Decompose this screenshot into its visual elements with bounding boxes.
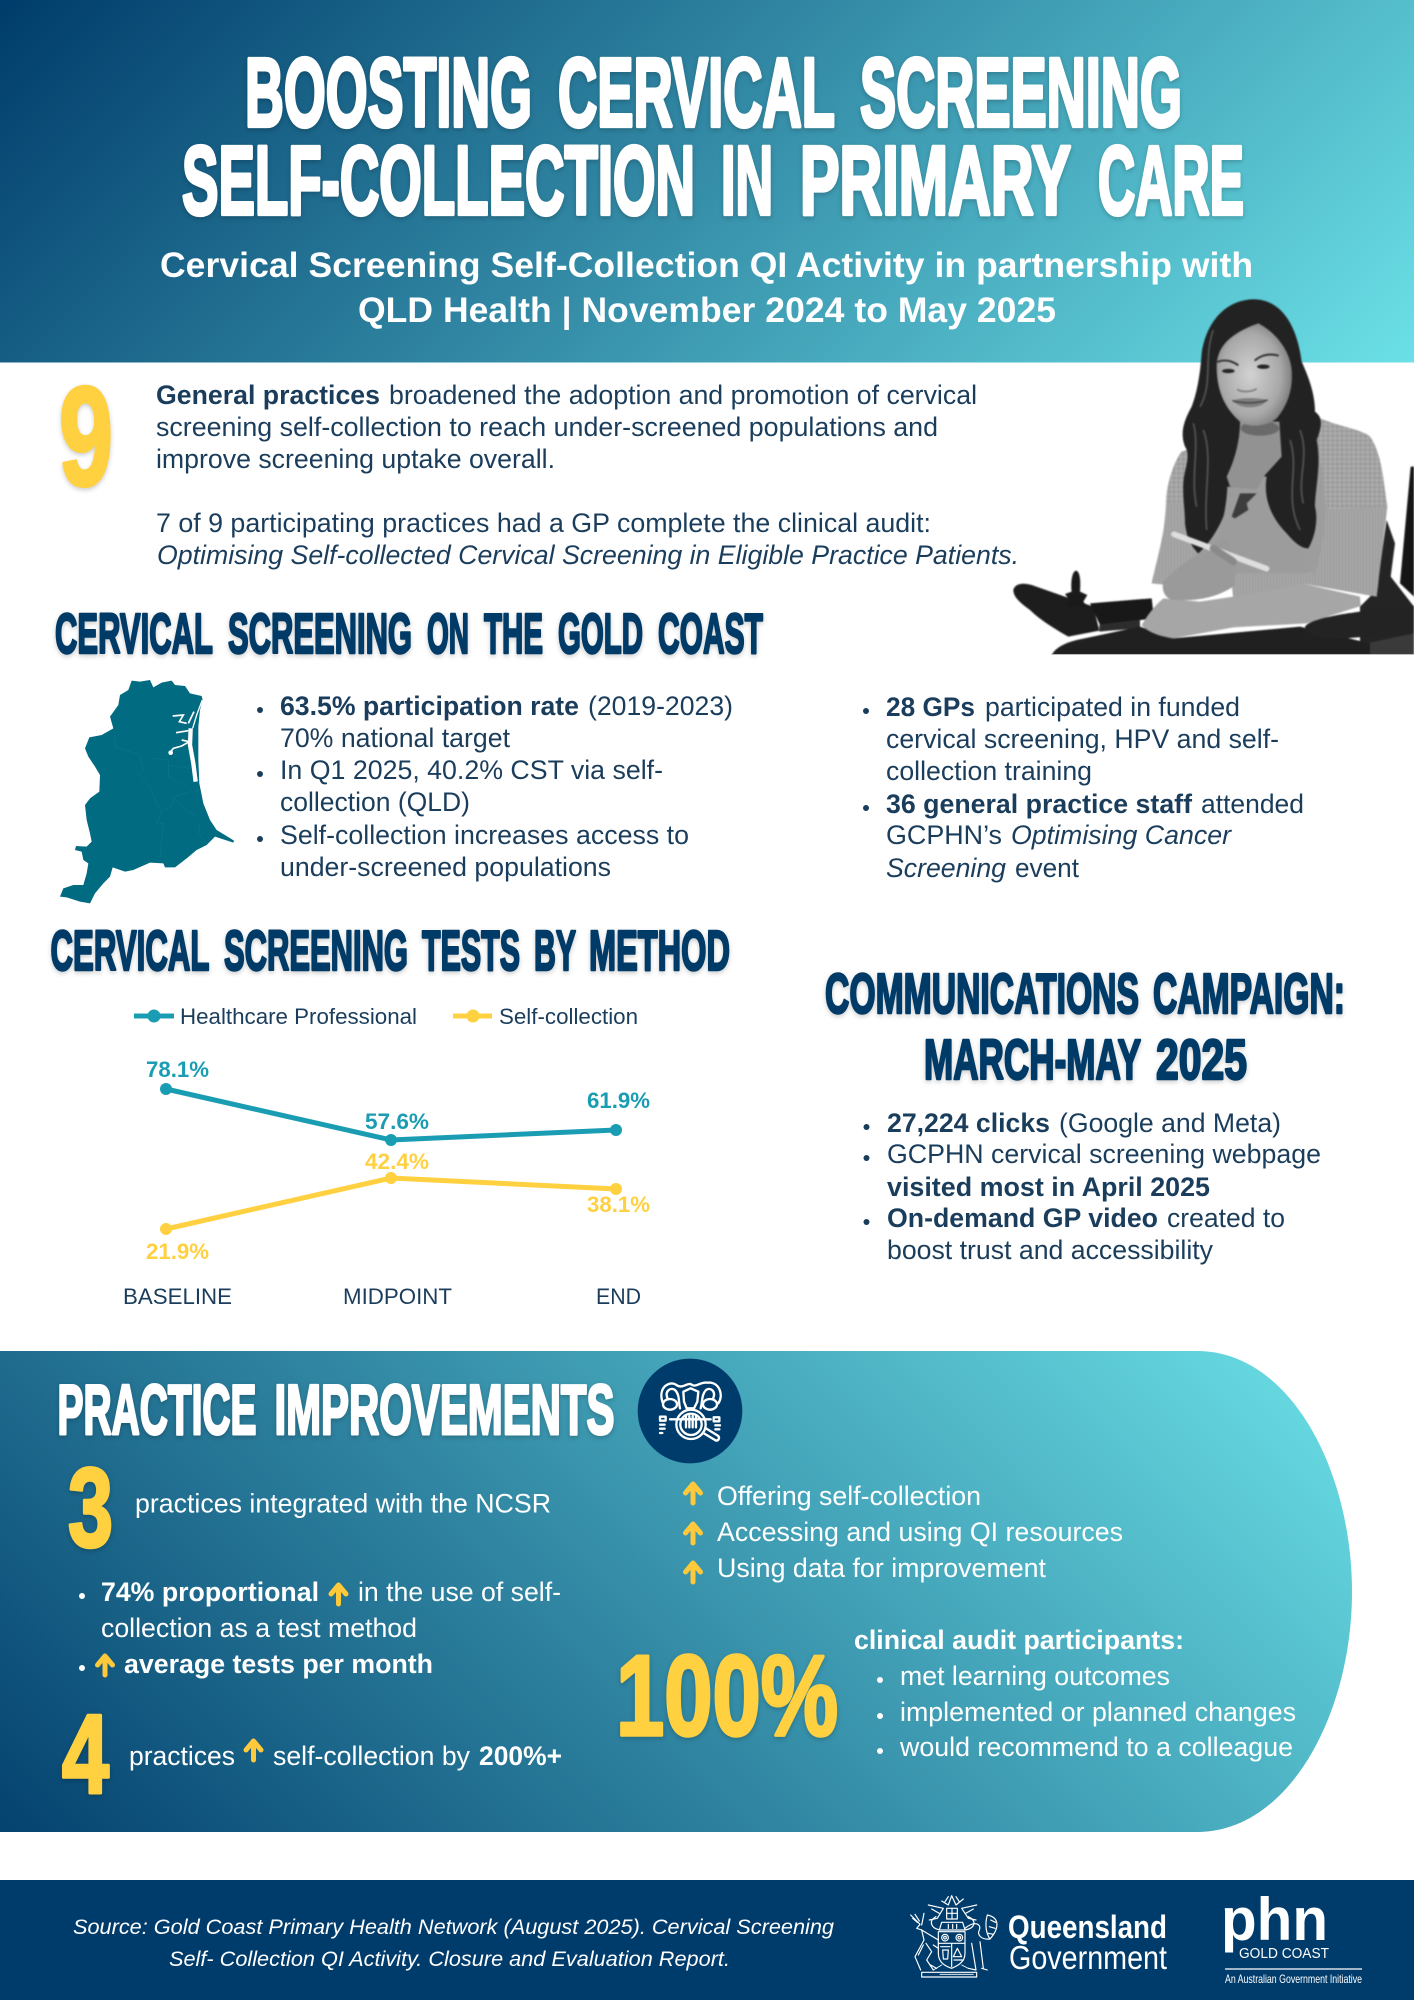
source citation [73, 1914, 834, 1971]
heading: tests by method: CERVICAL [50, 919, 210, 982]
bullets: proportional increase: average tests per month [124, 1649, 433, 1679]
intro paragraph: General practices [156, 380, 380, 410]
chart legend: Healthcare Professional [180, 1004, 417, 1029]
text: practices increased self-collection: practices [129, 1741, 235, 1771]
heading: tests by method: TESTS [422, 919, 520, 982]
self-collection series: 42.4% [365, 1149, 429, 1174]
bullets: GP training: attended [1201, 789, 1304, 819]
photo: GP in wheelchair holding a pen [1013, 299, 1414, 655]
header banner [0, 0, 1414, 362]
logo: Queensland Government [911, 1896, 1167, 1977]
heading: practice improvements: PRACTICE [58, 1370, 256, 1449]
panel: practice improvements [0, 1351, 1352, 1832]
bullets: proportional increase [79, 1577, 561, 1679]
chart x axis labels: END [596, 1284, 641, 1309]
bullets: participation: collection (QLD) [280, 787, 470, 817]
chart x axis labels [123, 1284, 641, 1309]
intro paragraph: improve screening uptake overall. [156, 444, 555, 474]
subtitle: QLD Health | November 2024 to May 2025 [358, 290, 1056, 330]
intro paragraph: Optimising Self-collected Cervical Screening in Eligible Practice Patients. [157, 540, 1019, 570]
bullets: proportional increase: collection as a test method [101, 1613, 417, 1643]
bullets: GP training: participated in funded [985, 692, 1240, 722]
source citation: Source: Gold Coast Primary Health Network (August 2025). Cervical Screening [73, 1914, 834, 1939]
chart legend: Self-collection [499, 1004, 638, 1029]
list: clinical audit participants: clinical audit participants: [854, 1625, 1184, 1655]
list: clinical audit participants: met learning outcomes [900, 1661, 1170, 1691]
bullets: GP training: collection training [886, 756, 1092, 786]
title: SELF-COLLECTION [182, 126, 695, 235]
heading: tests by method: METHOD [589, 919, 730, 982]
heading: tests by method: SCREENING [224, 919, 408, 982]
icon: up arrow [686, 1563, 700, 1582]
intro paragraph: 7 of 9 participating practices had a GP complete the clinical audit: [156, 508, 931, 538]
bullets: campaign [864, 1108, 1321, 1265]
crest [911, 1896, 997, 1977]
bullets: GP training: 28 GPs [886, 692, 975, 722]
logo: Queensland Government: Government [1009, 1939, 1167, 1976]
heading: tests by method [50, 919, 730, 982]
chart legend [134, 1004, 638, 1029]
title: IN [721, 126, 773, 235]
healthcare professional series [146, 1057, 650, 1146]
list: clinical audit participants: implemented or planned changes [900, 1697, 1296, 1727]
chart x axis labels: BASELINE [123, 1284, 232, 1309]
text: practices increased self-collection [129, 1741, 562, 1771]
footer band [0, 1880, 1414, 2000]
list: increases in practice activity: Offering self-collection [717, 1481, 981, 1511]
intro paragraph [156, 380, 1019, 570]
bullets: participation: Self-collection increases access to [280, 820, 689, 850]
chart x axis labels: MIDPOINT [343, 1284, 452, 1309]
big number 9: 9 [59, 357, 113, 515]
list: clinical audit participants [854, 1625, 1296, 1762]
bullets: participation: under-screened populations [280, 852, 611, 882]
bullets: GP training: 36 general practice staff [886, 789, 1192, 819]
heading: cervical screening on the gold coast: THE [484, 602, 543, 665]
heading: tests by method: BY [534, 919, 576, 982]
bullets: GP training: GCPHN’s [886, 820, 1002, 850]
title: PRIMARY [800, 126, 1071, 235]
bullets: GP training: Screening [886, 853, 1006, 883]
bullets: GP training: cervical screening, HPV and self- [886, 724, 1279, 754]
list: increases in practice activity: Using data for improvement [717, 1553, 1047, 1583]
big number 100%: 100% [616, 1633, 838, 1760]
icon: up arrow [98, 1656, 112, 1675]
title [182, 38, 1244, 235]
healthcare professional series: 57.6% [365, 1109, 429, 1134]
text: practices integrated: practices integrated with the NCSR [135, 1488, 551, 1518]
self-collection series: 21.9% [146, 1239, 209, 1264]
text: practices increased self-collection: self-collection by [273, 1741, 471, 1771]
logo: PHN Gold Coast [1221, 1886, 1362, 1986]
title: CERVICAL [558, 38, 835, 147]
heading: communications campaign: MARCH-MAY [924, 1028, 1141, 1091]
bullets: campaign: GCPHN cervical screening webpage [887, 1139, 1321, 1169]
icon: up arrow [331, 1585, 346, 1604]
heading: cervical screening on the gold coast: ON [427, 602, 469, 665]
heading: cervical screening on the gold coast [55, 602, 763, 665]
bullets: campaign: On-demand GP video [887, 1203, 1158, 1233]
heading: cervical screening on the gold coast: GOLD [558, 602, 643, 665]
heading: practice improvements: IMPROVEMENTS [274, 1370, 614, 1449]
bullets: participation: 70% national target [280, 723, 511, 753]
bullets: participation [257, 691, 733, 882]
heading: communications campaign [825, 962, 1345, 1091]
list: clinical audit participants: would recommend to a colleague [899, 1732, 1293, 1762]
bullets: GP training [863, 692, 1304, 883]
healthcare professional series: 78.1% [146, 1057, 209, 1082]
heading: communications campaign: COMMUNICATIONS [825, 962, 1139, 1025]
heading: practice improvements [58, 1370, 614, 1449]
bullets: participation: In Q1 2025, 40.2% CST via self- [280, 755, 663, 785]
logo: PHN Gold Coast: An Australian Government Initiative [1225, 1972, 1362, 1986]
subtitle [160, 245, 1253, 330]
bullets: campaign: 27,224 clicks [887, 1108, 1050, 1138]
text: practices increased self-collection: 200%+ [479, 1741, 562, 1771]
subtitle: Cervical Screening Self-Collection QI Activity in partnership with [160, 245, 1253, 285]
icon: up arrow [246, 1741, 261, 1760]
map: Gold Coast region [60, 680, 234, 903]
self-collection series: 38.1% [587, 1192, 650, 1217]
intro paragraph: screening self-collection to reach under-screened populations and [156, 412, 938, 442]
intro paragraph: broadened the adoption and promotion of cervical [389, 380, 977, 410]
title: CARE [1098, 126, 1244, 235]
bullets: campaign: visited most in April 2025 [887, 1172, 1210, 1202]
heading: communications campaign: 2025 [1156, 1028, 1247, 1091]
bullets: GP training: Optimising Cancer [1011, 820, 1232, 850]
bullets: proportional increase: 74% proportional [101, 1577, 319, 1607]
bullets: campaign: (Google and Meta) [1059, 1108, 1281, 1138]
bullets: campaign: boost trust and accessibility [887, 1235, 1214, 1265]
self-collection series [146, 1149, 650, 1264]
icon: uterus under magnifying glass [638, 1359, 742, 1463]
logo: PHN Gold Coast: GOLD COAST [1239, 1945, 1329, 1962]
bullets: participation: 63.5% participation rate [280, 691, 579, 721]
line chart: tests by method [123, 1004, 650, 1309]
bullets: proportional increase: in the use of self- [358, 1577, 561, 1607]
heading: cervical screening on the gold coast: COAST [658, 602, 763, 665]
logo: Queensland Government: Queensland [1008, 1909, 1167, 1945]
source citation: Self- Collection QI Activity. Closure and Evaluation Report. [169, 1946, 730, 1971]
logo: PHN Gold Coast: phn [1221, 1886, 1328, 1953]
list: increases in practice activity [686, 1481, 1123, 1583]
heading: cervical screening on the gold coast: SCREENING [228, 602, 412, 665]
heading: cervical screening on the gold coast: CERVICAL [55, 602, 213, 665]
big number 4: 4 [62, 1692, 109, 1817]
icon: up arrow [686, 1484, 700, 1503]
list: increases in practice activity: Accessing and using QI resources [717, 1517, 1123, 1547]
bullets: campaign: created to [1167, 1203, 1285, 1233]
big number 3: 3 [68, 1445, 113, 1570]
icon: up arrow [686, 1524, 700, 1543]
healthcare professional series: 61.9% [587, 1088, 650, 1113]
title: BOOSTING [245, 38, 532, 147]
bullets: participation: (2019-2023) [588, 691, 733, 721]
bullets: GP training: event [1015, 853, 1080, 883]
